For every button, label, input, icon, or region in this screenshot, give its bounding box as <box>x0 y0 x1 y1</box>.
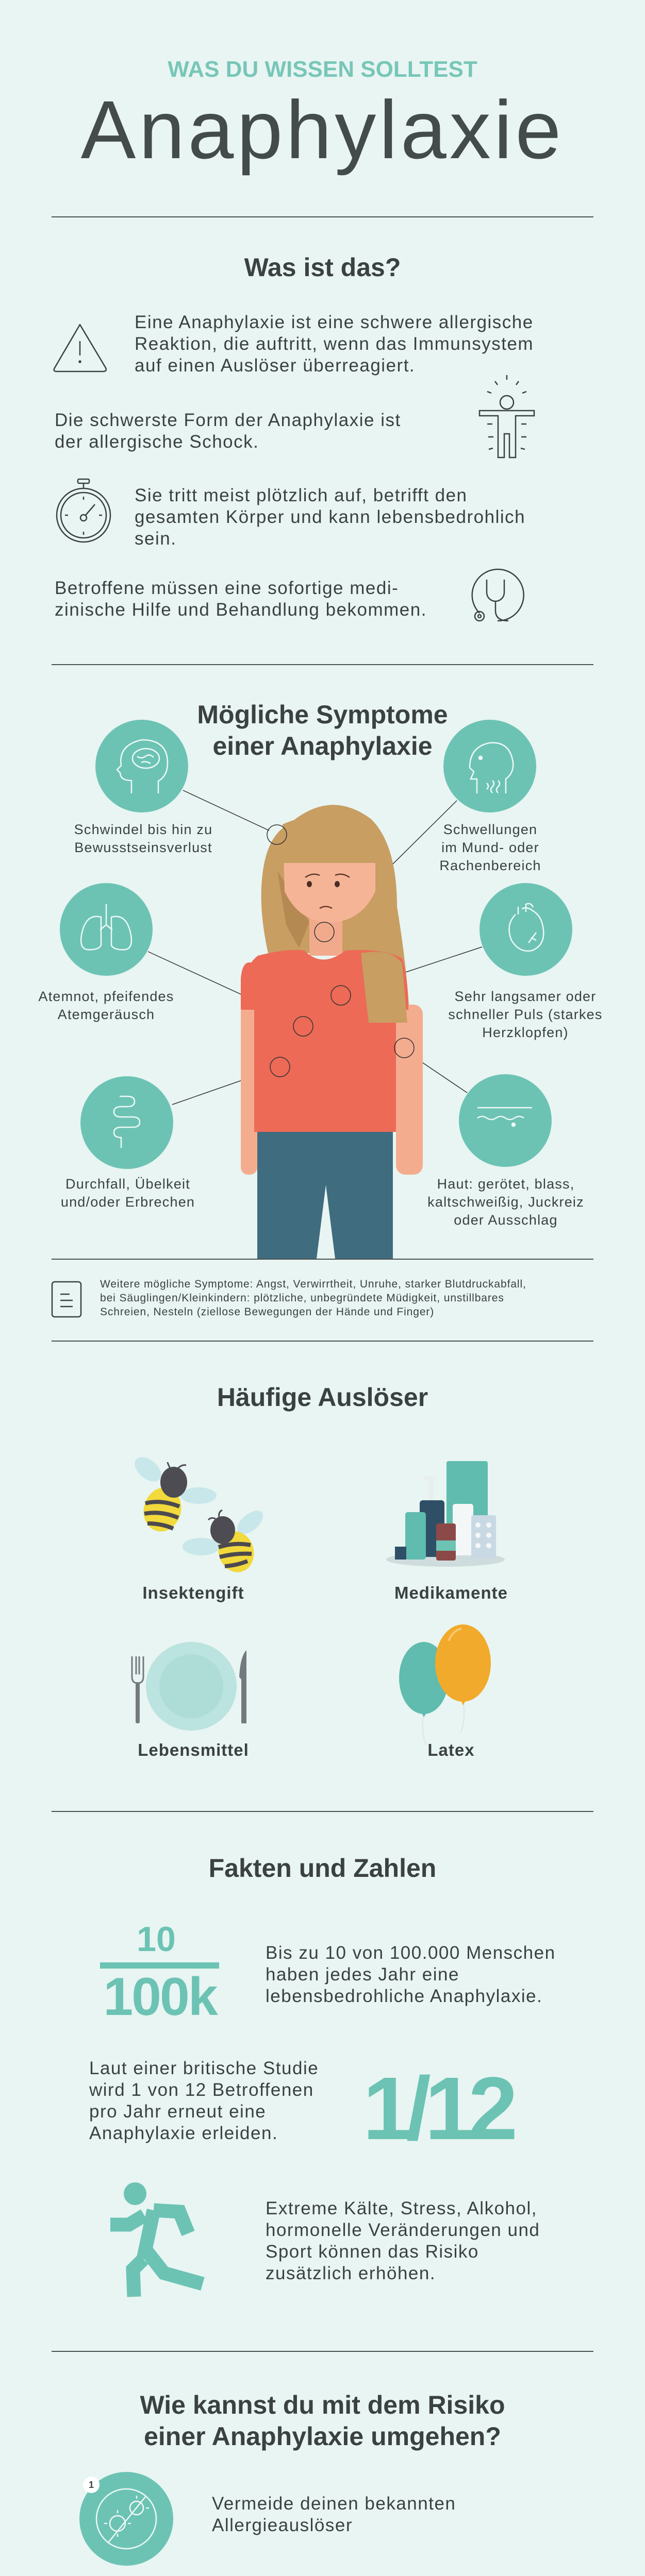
label: Puls: schneller Puls (starkes <box>448 1007 603 1022</box>
text: definition: Reaktion, die auftritt, wenn das Immunsystem <box>135 334 534 354</box>
text: step 1 <box>212 2494 456 2535</box>
text: step 1: Allergieauslöser <box>212 2515 353 2535</box>
risk circle 1 <box>79 2472 173 2566</box>
symptom marker circles <box>267 825 414 1077</box>
label: Atemnot <box>38 989 174 1022</box>
icon circle: lungs <box>60 883 153 976</box>
icon circle: heart <box>479 883 572 976</box>
label: Schwindel: Schwindel bis hin zu <box>74 822 212 837</box>
heading: Auslöser: Häufige Auslöser <box>217 1383 428 1412</box>
text: 10 von 100.000: lebensbedrohliche Anaphylaxie. <box>266 1986 542 2006</box>
label: Latex: Latex <box>427 1740 475 1759</box>
label: Schwellungen: Rachenbereich <box>439 858 541 873</box>
icon: runner <box>110 2182 203 2297</box>
text: weitere Symptome: Weitere mögliche Symptome: Angst, Verwirrtheit, Unruhe, starker Blutdruckabfall, <box>100 1278 526 1290</box>
label: Haut: kaltschweißig, Juckreiz <box>427 1194 584 1210</box>
text: weitere Symptome: bei Säuglingen/Kleinkindern: plötzliche, unbegründete Müdigkeit, unstillbares <box>100 1292 504 1304</box>
text: britische Studie: Anaphylaxie erleiden. <box>89 2123 278 2143</box>
text: 10 von 100.000 <box>266 1943 556 2006</box>
label: Puls <box>448 989 603 1040</box>
heading: Symptome <box>197 700 448 760</box>
icon: stopwatch <box>57 479 110 542</box>
text: hilfe: zinische Hilfe und Behandlung bekommen. <box>55 600 427 620</box>
label: Schwellungen: im Mund- oder <box>441 840 539 855</box>
icon circle: skin <box>459 1074 552 1167</box>
label: Atemnot: Atemgeräusch <box>58 1007 155 1022</box>
text: Risiko: Extreme Kälte, Stress, Alkohol, <box>266 2198 537 2218</box>
icon circle: intestine <box>80 1076 173 1169</box>
text: plötzlich: sein. <box>135 529 176 549</box>
label: Haut: Haut: gerötet, blass, <box>437 1176 574 1192</box>
icon: note <box>52 1282 81 1317</box>
label: Durchfall: und/oder Erbrechen <box>61 1194 195 1210</box>
text: 10 von 100.000: Bis zu 10 von 100.000 Menschen <box>266 1943 556 1963</box>
label: Atemnot: Atemnot, pfeifendes <box>39 989 174 1004</box>
label: Durchfall: Durchfall, Übelkeit <box>65 1176 190 1192</box>
text: britische Studie <box>89 2058 319 2143</box>
stat: 100k: 100k <box>103 1967 217 2027</box>
label: Schwellungen <box>439 822 541 873</box>
text: step 1: Vermeide deinen bekannten <box>212 2494 456 2514</box>
heading: Risiko umgehen: Wie kannst du mit dem Risiko <box>140 2391 505 2419</box>
text: weitere Symptome <box>100 1278 526 1318</box>
text: Risiko: hormonelle Veränderungen und <box>266 2220 540 2240</box>
fraction bar <box>100 1962 219 1969</box>
illustration: balloons <box>399 1624 491 1745</box>
icon circle: brain <box>95 720 188 812</box>
text: schock: der allergische Schock. <box>55 432 259 452</box>
label: Medikamente: Medikamente <box>394 1583 508 1602</box>
label: Puls: Sehr langsamer oder <box>455 989 596 1004</box>
text: britische Studie: Laut einer britische Studie <box>89 2058 319 2078</box>
label: Haut: oder Ausschlag <box>454 1212 558 1228</box>
text: weitere Symptome: Schreien, Nesteln (ziellose Bewegungen der Hände und Finger) <box>100 1306 434 1318</box>
text: Risiko: zusätzlich erhöhen. <box>266 2263 436 2283</box>
heading: Was ist das: Was ist das? <box>244 253 401 282</box>
heading: Fakten: Fakten und Zahlen <box>209 1854 436 1883</box>
title: Anaphylaxie <box>81 83 564 176</box>
stat: 10: 10 <box>137 1920 176 1959</box>
icon: stethoscope <box>472 569 524 621</box>
text: britische Studie: pro Jahr erneut eine <box>89 2102 266 2122</box>
illustration: plate and cutlery <box>132 1642 246 1731</box>
heading: Symptome: einer Anaphylaxie <box>212 732 433 760</box>
text: schock: Die schwerste Form der Anaphylaxie ist <box>55 410 401 430</box>
text: 10 von 100.000: haben jedes Jahr eine <box>266 1964 459 1985</box>
icon circle: head throat <box>443 720 536 812</box>
text: definition <box>135 312 534 376</box>
label: Haut <box>427 1176 584 1228</box>
text: Risiko <box>266 2198 540 2283</box>
symptom connector lines <box>148 790 482 1105</box>
text: hilfe <box>55 578 427 620</box>
label: Lebensmittel: Lebensmittel <box>138 1740 249 1759</box>
label: Durchfall <box>61 1176 195 1210</box>
illustration: girl <box>241 805 423 1259</box>
subtitle: WAS DU WISSEN SOLLTEST <box>168 57 477 82</box>
icon: warning triangle <box>54 325 106 371</box>
heading: Risiko umgehen: einer Anaphylaxie umgehen? <box>144 2422 501 2451</box>
label: Schwindel <box>74 822 212 855</box>
illustration: medicines <box>386 1461 505 1567</box>
label: Schwindel: Bewusstseinsverlust <box>74 840 212 855</box>
heading: Risiko umgehen <box>140 2391 505 2451</box>
heading: Symptome: Mögliche Symptome <box>197 700 448 729</box>
label: Schwellungen: Schwellungen <box>443 822 537 837</box>
text: definition: Eine Anaphylaxie ist eine schwere allergische <box>135 312 534 332</box>
text: plötzlich <box>135 485 525 549</box>
icon: body shock <box>479 375 534 457</box>
text: Risiko: Sport können das Risiko <box>266 2242 479 2262</box>
badge number 1: 1 <box>89 2480 94 2490</box>
stat: 1/12: 1/12 <box>363 2058 511 2158</box>
text: definition: auf einen Auslöser überreagiert. <box>135 355 415 376</box>
label: Puls: Herzklopfen) <box>482 1025 569 1040</box>
text: britische Studie: wird 1 von 12 Betroffenen <box>89 2080 314 2100</box>
text: schock <box>55 410 401 452</box>
illustration: bees <box>130 1452 267 1576</box>
text: plötzlich: gesamten Körper und kann lebensbedrohlich <box>135 507 525 527</box>
label: Insektengift: Insektengift <box>142 1583 244 1602</box>
text: hilfe: Betroffene müssen eine sofortige medi- <box>55 578 399 598</box>
text: plötzlich: Sie tritt meist plötzlich auf, betrifft den <box>135 485 468 505</box>
